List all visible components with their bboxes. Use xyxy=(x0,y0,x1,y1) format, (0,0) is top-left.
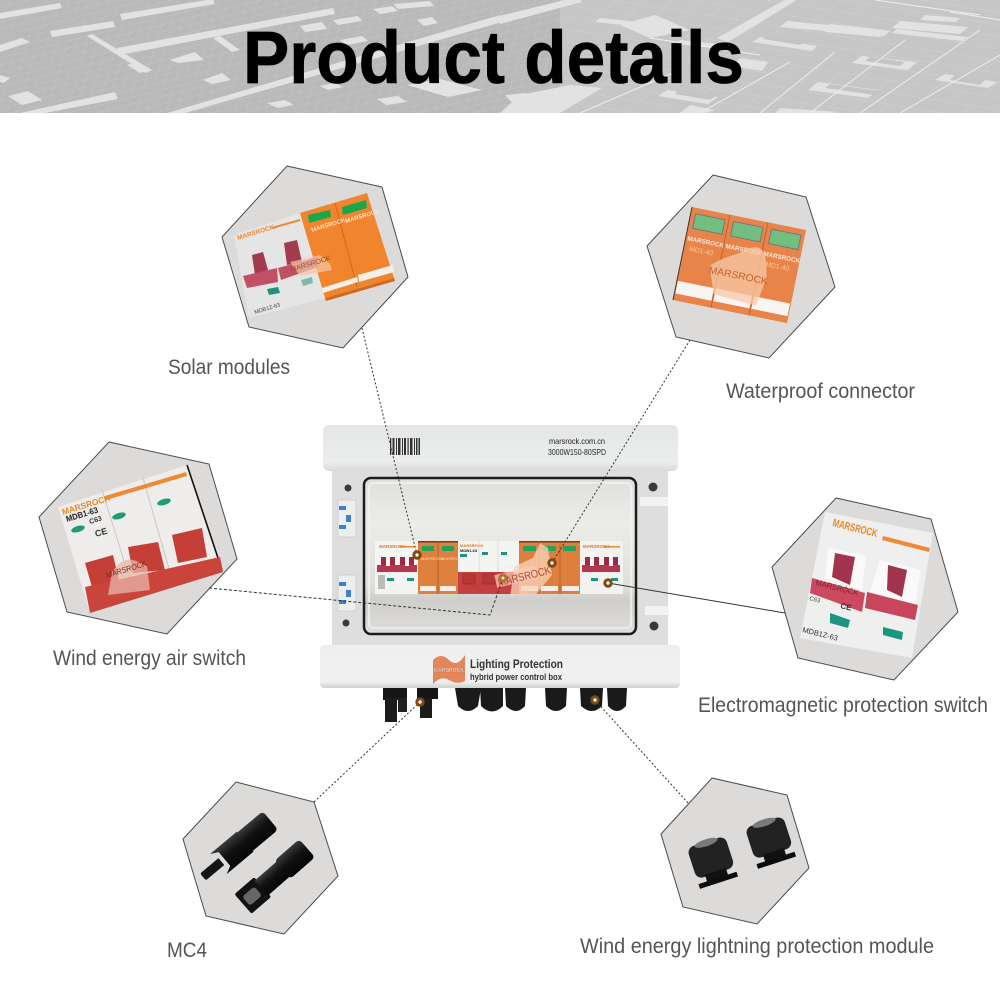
icon: cable gland right xyxy=(744,813,796,869)
icon: three-pole surge protector: MARSROCK xyxy=(725,243,763,257)
panel: MC4 hexagon xyxy=(183,782,338,934)
two surge protectors xyxy=(418,541,464,594)
icon: breaker with surge protector: MARSROCK xyxy=(345,209,381,225)
icon: three-pole surge protector xyxy=(673,207,807,323)
bottom cap xyxy=(320,645,680,688)
gasket and inner tray xyxy=(364,478,636,634)
icon: two-pole breaker: MARSROCK xyxy=(815,578,860,598)
header banner: grey solar roof photo xyxy=(0,0,1000,113)
two surge protectors: MARSROCK xyxy=(421,556,444,561)
icon: three-pole surge protector: MARSROCK xyxy=(763,251,801,265)
panel: waterproof connector hexagon xyxy=(647,175,835,358)
left two-pole breaker: MARSROCK xyxy=(379,544,406,549)
icon: three-pole surge protector: MARSROCK xyxy=(687,235,725,250)
leader line: electromagnetic protection switch xyxy=(608,583,785,613)
two surge protectors: MARSROCK xyxy=(441,556,464,561)
right two-pole breaker xyxy=(580,541,623,594)
right two-pole breaker: MARSROCK xyxy=(583,544,610,549)
leader line: MC4 xyxy=(314,702,420,802)
leader line: waterproof connector xyxy=(552,340,690,563)
breaker row xyxy=(375,541,623,596)
icon: two-pole breaker xyxy=(800,512,933,658)
icon: two-pole breaker: C63 xyxy=(809,596,821,605)
panel: combiner box xyxy=(320,425,680,722)
icon: breaker with surge protector: MDB1Z-63 xyxy=(254,302,281,316)
icon: breaker with surge protector: MARSROCK xyxy=(311,218,347,234)
icon: three-pole breaker: C63 xyxy=(89,515,103,526)
label: Wind energy lightning protection module: Wind energy lightning protection module xyxy=(580,935,934,958)
panel: electromagnetic protection switch hexagon xyxy=(772,498,958,680)
icon: three-pole breaker xyxy=(58,465,223,613)
top cap with labels: marsrock.com.cn xyxy=(549,436,605,446)
three-pole breaker: MARSROCK xyxy=(460,543,484,548)
screw holes xyxy=(342,482,658,630)
watermark xyxy=(494,543,553,596)
icon: two-pole breaker: MDB1Z-63 xyxy=(802,625,839,643)
leader line: solar modules xyxy=(362,328,417,555)
icon: three-pole breaker: MARSROCK xyxy=(61,492,112,517)
icon: MC4 female connector xyxy=(234,838,316,914)
icon: breaker with surge protector xyxy=(234,193,395,318)
icon: three-pole breaker: MARSROCK xyxy=(105,559,148,580)
title: Product details xyxy=(243,16,744,99)
icon: two-pole breaker: CE xyxy=(840,601,853,613)
box body xyxy=(332,465,668,649)
bottom cap: Lighting Protection xyxy=(470,657,563,671)
icon: three-pole breaker: MDB1-63 xyxy=(65,505,99,524)
panel: lightning protection module hexagon xyxy=(661,778,809,924)
icon: breaker with surge protector: MARSROCK xyxy=(290,255,332,274)
label: Wind energy air switch: Wind energy air switch xyxy=(53,647,246,670)
three surge protectors xyxy=(519,541,580,594)
icon: cable gland left xyxy=(686,833,738,889)
watermark: MARSROCK xyxy=(497,564,553,589)
icon: two-pole breaker: MARSROCK xyxy=(831,517,879,540)
icon: three-pole breaker: CE xyxy=(94,526,109,539)
label: MC4: MC4 xyxy=(167,939,207,962)
icon: breaker with surge protector: MARSROCK xyxy=(237,224,275,242)
top cap with labels xyxy=(323,425,678,471)
logo: orange wave xyxy=(433,655,465,684)
left two-pole breaker xyxy=(377,544,417,589)
label: Solar modules: Solar modules xyxy=(168,356,290,379)
top cap with labels: 3000W150-80SPD xyxy=(548,447,606,457)
icon: three-pole surge protector: MD1-40 xyxy=(689,246,714,258)
icon: three-pole surge protector: MARSROCK xyxy=(708,265,769,288)
label: Waterproof connector: Waterproof connector xyxy=(726,380,915,403)
logo: orange wave: MARSROCK xyxy=(434,668,465,674)
panel: solar modules hexagon xyxy=(222,166,408,348)
blue clips xyxy=(338,497,669,615)
leader line: lightning protection module xyxy=(595,700,688,803)
icon: three-pole surge protector: MD1-40 xyxy=(765,261,790,273)
leader line: wind energy air switch xyxy=(209,578,503,615)
three-pole breaker: MDB1-63 xyxy=(460,548,478,553)
icon: MC4 male connector xyxy=(195,810,279,887)
panel: wind energy air switch hexagon xyxy=(39,442,237,634)
bottom cap: hybrid power control box xyxy=(470,672,562,682)
three-pole breaker xyxy=(458,541,519,594)
connectors below the box xyxy=(383,686,627,722)
marker dots xyxy=(414,552,611,705)
